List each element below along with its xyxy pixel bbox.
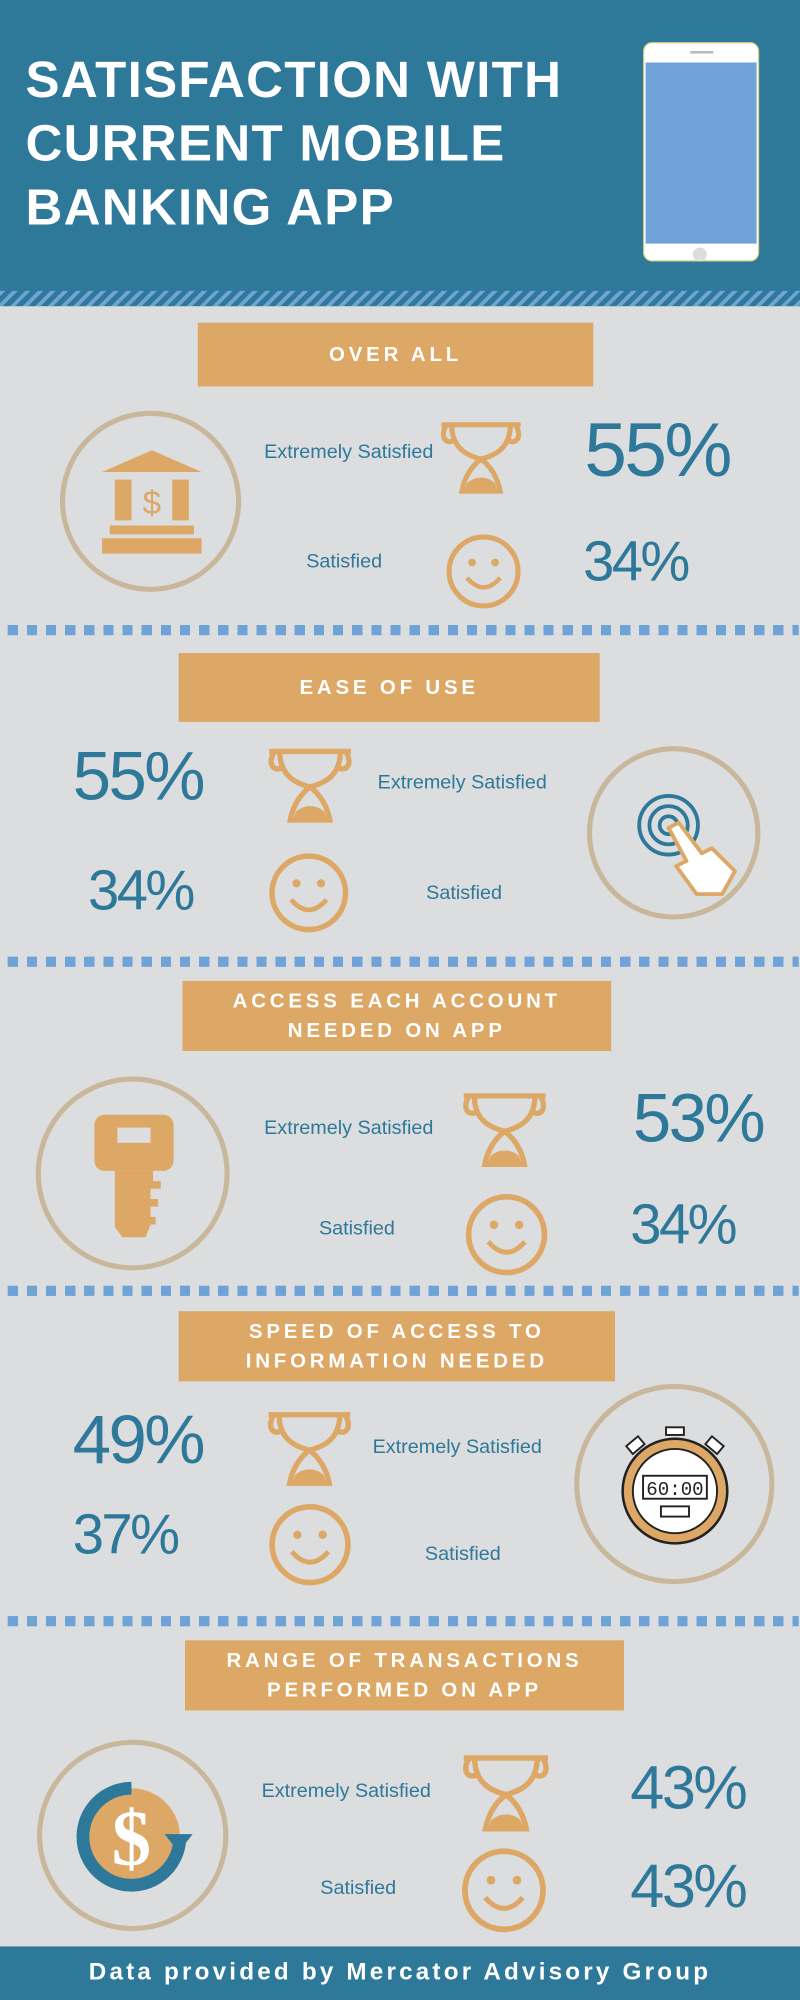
stat: 55%: 55% [73,739,203,815]
stat: 34%: 34% [583,531,688,593]
icon: dollar cycle [37,1740,228,1931]
icon: touch [587,746,760,920]
title [26,52,562,236]
heading: PERFORMED ON APP [267,1679,542,1701]
icon: smiley [462,1848,546,1932]
icon: trophy [268,1412,351,1486]
stat: 37%: 37% [73,1504,177,1566]
icon: smiley [466,1194,548,1276]
icon: key [36,1077,230,1270]
header [0,0,800,306]
text: extremely satisfied: Extremely Satisfied [262,1781,431,1802]
title: CURRENT MOBILE [26,116,506,172]
heading: ACCESS EACH ACCOUNT [233,990,561,1012]
footer [0,1946,800,2000]
icon: dollar cycle: $ [112,1796,151,1883]
stat: 34%: 34% [88,860,193,922]
heading: NEEDED ON APP [288,1020,506,1041]
heading [185,1640,624,1710]
panel: ease of use [73,653,760,932]
stat: 43%: 43% [630,1755,745,1823]
title: BANKING APP [26,180,395,236]
icon: phone [643,42,759,261]
heading [179,1311,615,1381]
heading: INFORMATION NEEDED [246,1350,548,1372]
heading: RANGE OF TRANSACTIONS [226,1650,582,1672]
icon: trophy [463,1093,546,1167]
stat: 34%: 34% [630,1194,735,1256]
icon: stopwatch [574,1384,774,1584]
text: satisfied: Satisfied [426,883,502,904]
stat: 49%: 49% [73,1402,203,1478]
text: extremely satisfied: Extremely Satisfied [373,1436,542,1458]
stat: 55%: 55% [584,407,730,492]
icon: smiley [446,534,521,608]
icon: trophy [440,422,522,494]
icon: bank: $ [143,485,161,522]
stat: 43%: 43% [630,1853,745,1921]
text: extremely satisfied: Extremely Satisfied [264,441,433,463]
title: SATISFACTION WITH [26,52,562,108]
icon: trophy [268,748,352,823]
text: satisfied: Satisfied [425,1543,501,1565]
text: extremely satisfied: Extremely Satisfied [378,772,547,793]
panel: range of transactions [37,1640,746,1932]
icon: stopwatch: 60:00 [646,1479,704,1501]
text: extremely satisfied: Extremely Satisfied [264,1117,433,1139]
icon: trophy [463,1755,549,1832]
panel: over all [60,322,730,608]
icon: smiley [269,853,348,932]
icon: bank [60,411,241,592]
icon: smiley [269,1504,351,1586]
panel: access each account [36,980,764,1276]
heading [182,981,611,1051]
heading: EASE OF USE [299,677,479,698]
panel: speed of access [73,1311,774,1586]
text: satisfied: Satisfied [306,551,382,573]
text: satisfied: Satisfied [320,1878,396,1899]
footer: Data provided by Mercator Advisory Group [89,1959,711,1986]
stat: 53%: 53% [633,1080,763,1157]
text: satisfied: Satisfied [319,1218,395,1240]
heading: SPEED OF ACCESS TO [249,1321,545,1342]
heading [179,653,600,722]
heading: OVER ALL [329,344,462,365]
heading [198,323,593,386]
